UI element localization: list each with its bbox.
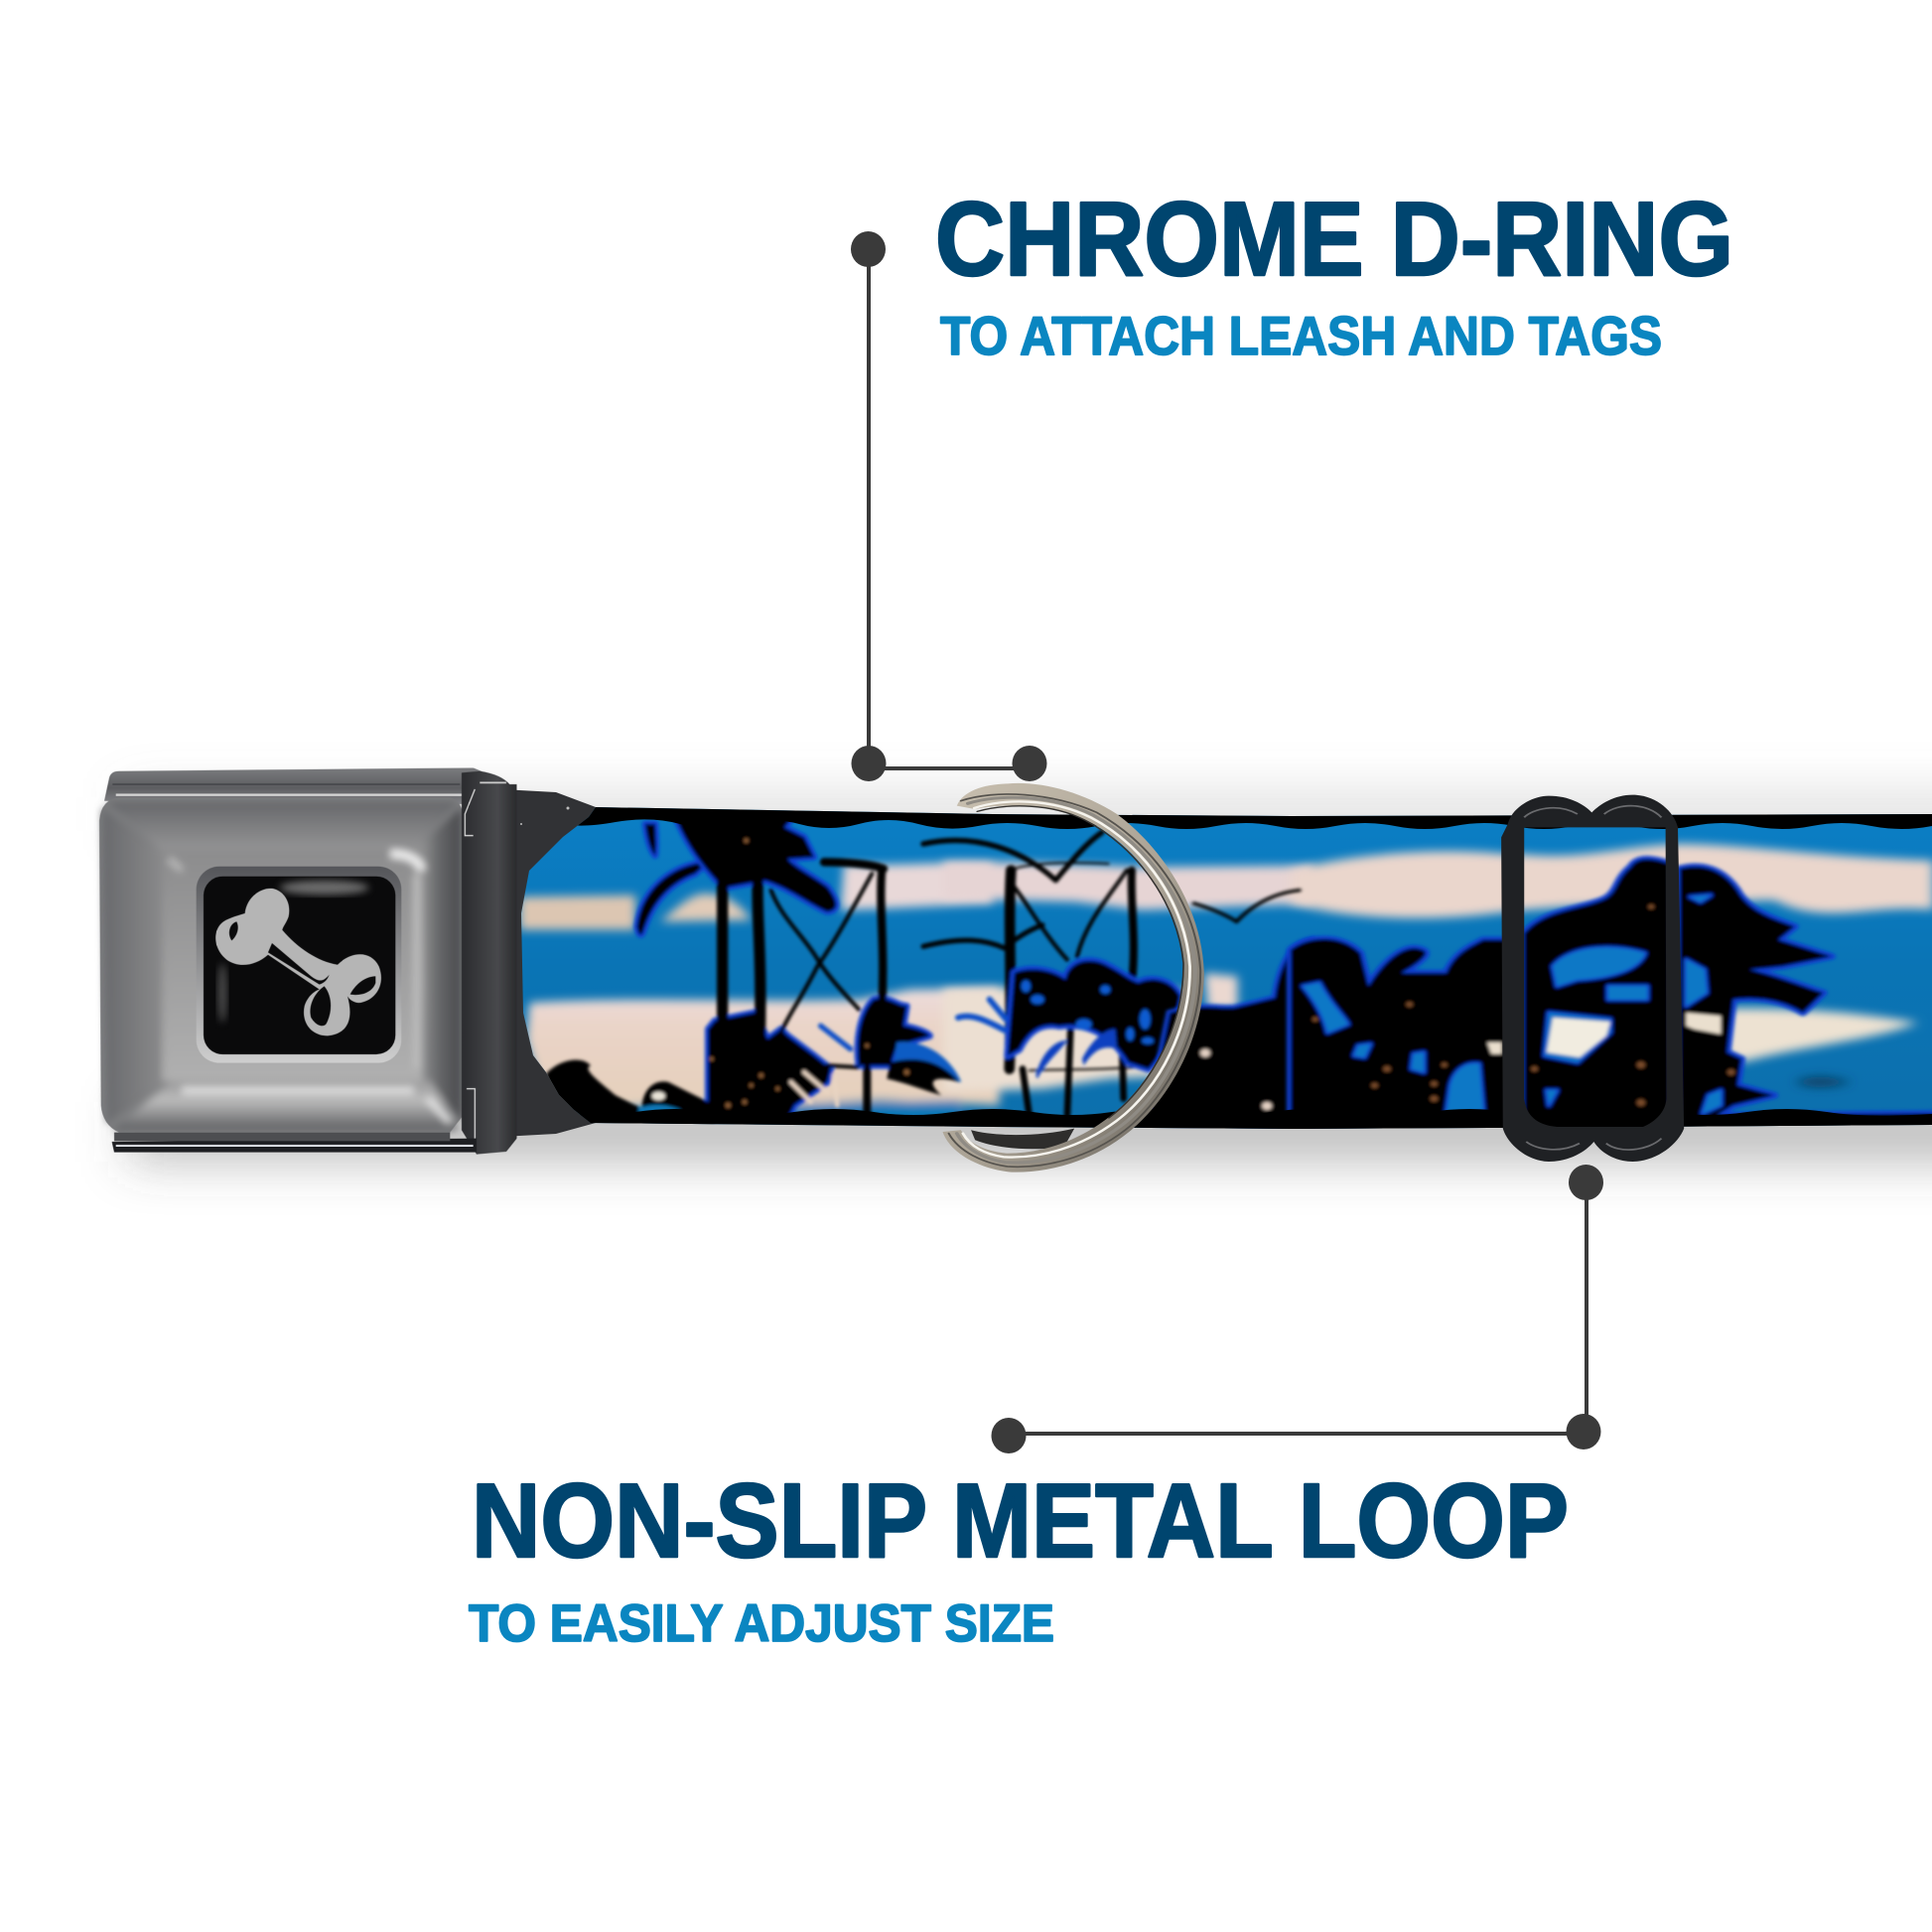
badge side gloss — [217, 963, 227, 1023]
subheading: adjust size: TO EASILY ADJUST SIZE — [469, 1594, 1054, 1653]
top and bottom black stitched border — [578, 807, 1932, 829]
seatbelt buckle — [99, 767, 517, 1155]
callout line: metal loop — [991, 1165, 1603, 1453]
heading: chrome d-ring: CHROME D-RING — [935, 181, 1733, 298]
badge gloss — [280, 881, 369, 895]
clouds — [519, 863, 1000, 1119]
badge window — [197, 867, 401, 1063]
heading: non-slip metal loop: NON-SLIP METAL LOOP — [472, 1462, 1569, 1580]
callout line: chrome D-ring — [851, 231, 1046, 781]
buckle bevelled face — [99, 797, 464, 1133]
sky — [516, 804, 1932, 1132]
birds and palms, centre section — [923, 832, 1179, 1115]
palm silhouettes, left section — [546, 816, 961, 1129]
subheading: attach leash: TO ATTACH LEASH AND TAGS — [940, 305, 1662, 366]
buckle right clamp — [462, 771, 517, 1155]
strap print — [516, 804, 1932, 1132]
collar strap with sunset palm print — [501, 789, 1932, 1137]
webbing speckles — [506, 806, 570, 1106]
strap shadow — [129, 794, 1932, 1162]
palms, right section — [1291, 859, 1932, 1132]
icon: non-slip metal loop — [1501, 795, 1684, 1162]
buckle bottom chrome edge — [112, 1139, 477, 1153]
icon: chrome D-ring — [942, 783, 1204, 1173]
buckle top lip — [104, 767, 493, 804]
buckle webbing backing — [501, 789, 596, 1137]
icon: bone logo — [215, 889, 381, 1035]
